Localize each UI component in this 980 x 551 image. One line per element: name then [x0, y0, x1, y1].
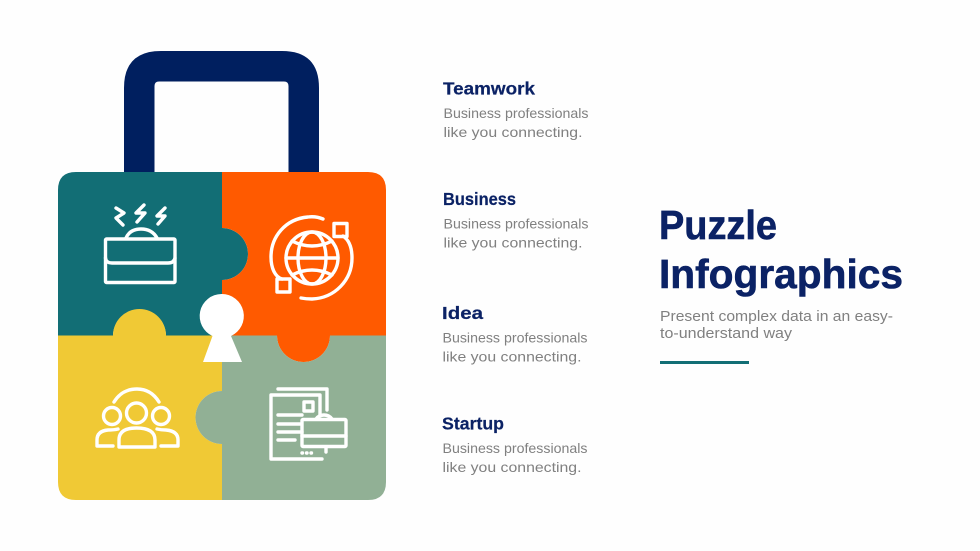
icon: team [97, 389, 178, 447]
item: Business [443, 189, 588, 250]
heading: Idea: Idea [442, 303, 483, 323]
body text: Startup: Business professionals [442, 440, 588, 456]
item: Business: like you connecting. [444, 234, 582, 250]
subtitle: to-understand way [660, 326, 793, 342]
icon: globe [271, 217, 352, 299]
item: Startup: like you connecting. [442, 459, 582, 475]
puzzle piece: orange [222, 172, 386, 362]
item: Teamwork: like you connecting. [444, 124, 582, 140]
heading: Startup: Startup [442, 414, 504, 434]
title: Puzzle [659, 202, 777, 248]
keyhole [200, 294, 244, 362]
puzzle piece: teal [58, 172, 248, 336]
item: Startup [442, 414, 588, 475]
subtitle: Present complex data in an easy- [660, 309, 893, 325]
subtitle [660, 309, 893, 342]
puzzle piece: yellow [58, 309, 222, 500]
item: Teamwork [443, 78, 588, 140]
item: Idea [442, 303, 588, 364]
puzzle padlock [58, 172, 386, 500]
icon: briefcase with lightning [106, 205, 175, 282]
item: Idea: like you connecting. [442, 348, 582, 364]
puzzle piece: sage [196, 336, 386, 500]
title: Infographics [659, 251, 903, 297]
body text: Idea: Business professionals [442, 330, 588, 346]
title [659, 202, 903, 297]
icon: document with briefcase [271, 389, 346, 459]
body text: Teamwork: Business professionals [444, 105, 588, 121]
accent line [660, 361, 749, 364]
body text: Business: Business professionals [444, 216, 588, 232]
heading: Teamwork: Teamwork [443, 78, 535, 98]
heading: Business: Business [443, 189, 516, 209]
padlock handle [124, 51, 319, 173]
